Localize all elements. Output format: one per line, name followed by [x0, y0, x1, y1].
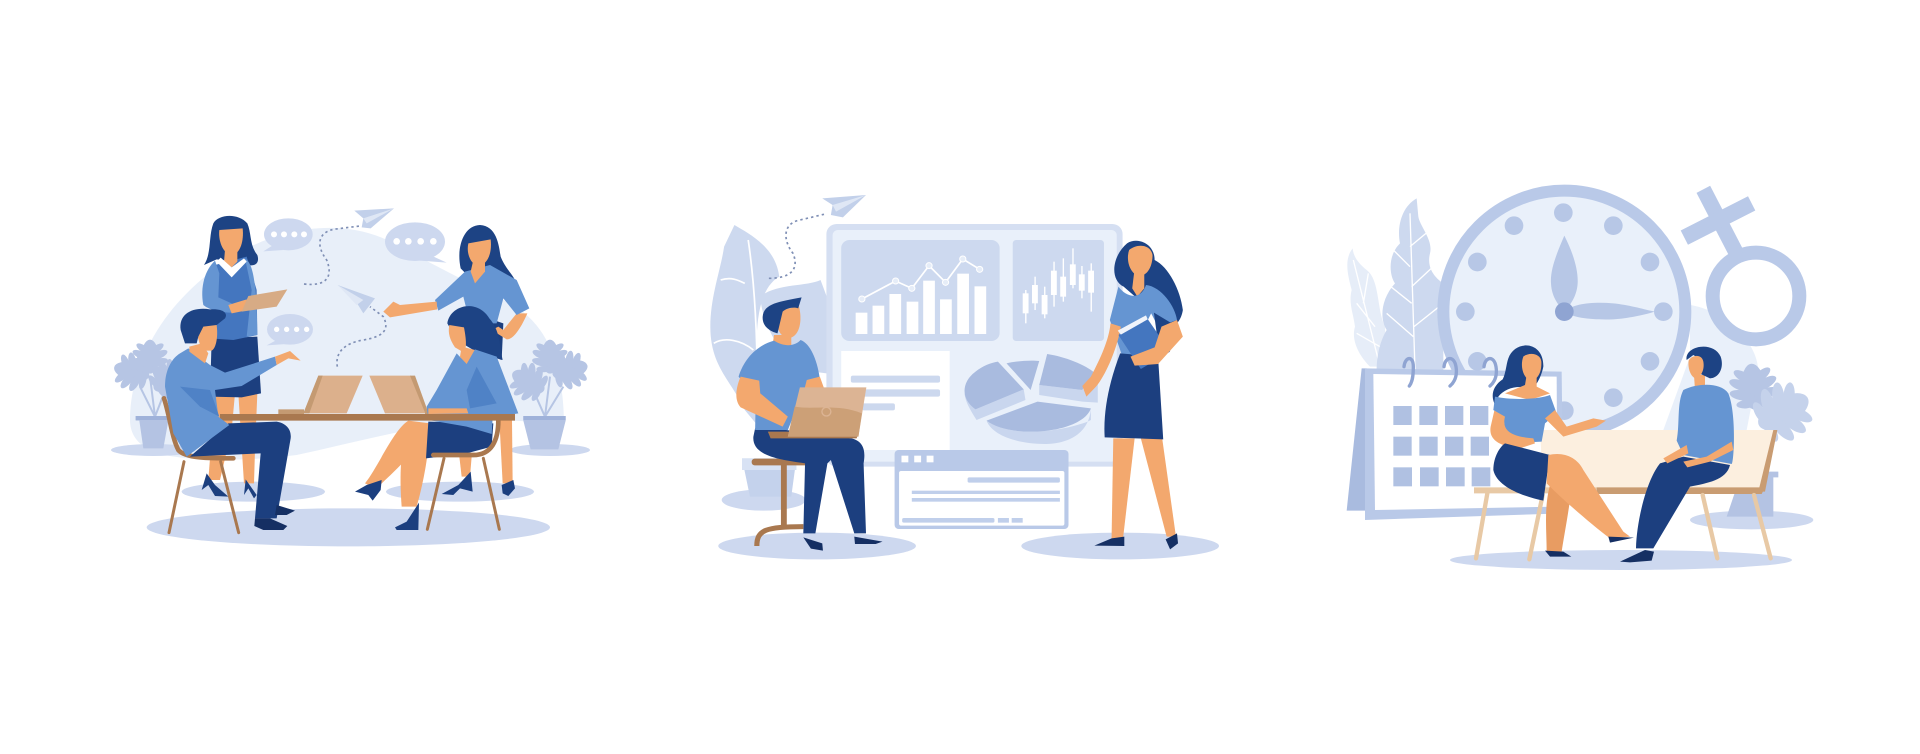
ground shadows — [718, 489, 1219, 559]
panel: data analysis — [710, 195, 1219, 559]
person: seated man pointing — [165, 309, 301, 530]
person: standing woman pointing — [383, 225, 529, 496]
browser window — [895, 450, 1069, 529]
speech bubbles — [263, 218, 447, 345]
table — [220, 414, 515, 421]
stool — [752, 459, 808, 546]
calendar — [1347, 359, 1563, 520]
person: seated woman with short hair — [1620, 347, 1734, 562]
laptops — [278, 376, 453, 414]
chair: left — [164, 398, 239, 533]
person: seated man with laptop — [736, 297, 883, 551]
ground shadows — [1450, 511, 1813, 570]
person: seated woman — [355, 306, 518, 530]
female symbol — [1684, 189, 1799, 339]
dashboard monitor — [826, 224, 1123, 467]
bar and line chart — [841, 240, 1000, 341]
dotted flight paths — [304, 226, 386, 367]
pale leaf — [1347, 248, 1387, 367]
paper planes — [338, 208, 394, 313]
bench — [1474, 430, 1777, 559]
text card — [841, 351, 950, 450]
paper plane — [822, 195, 866, 217]
chair: right — [427, 421, 499, 529]
plant with pot — [710, 225, 827, 497]
dotted flight path — [769, 214, 824, 278]
large leaf — [1377, 198, 1443, 370]
background blob — [130, 228, 564, 460]
person: standing woman with folder — [1082, 241, 1183, 549]
plant: left — [109, 340, 195, 448]
ground shadows — [111, 444, 590, 546]
clock — [1443, 191, 1685, 433]
panel: consultation with clock — [1347, 189, 1823, 570]
person: seated woman in off-shoulder top — [1490, 345, 1634, 557]
plant with pot — [1726, 362, 1823, 517]
person: standing woman with tablet — [202, 216, 287, 498]
plant: right — [503, 340, 593, 449]
panel: team meeting — [109, 208, 593, 546]
background blob — [1663, 305, 1758, 430]
candlestick chart — [1013, 240, 1104, 341]
pie chart — [964, 354, 1098, 444]
